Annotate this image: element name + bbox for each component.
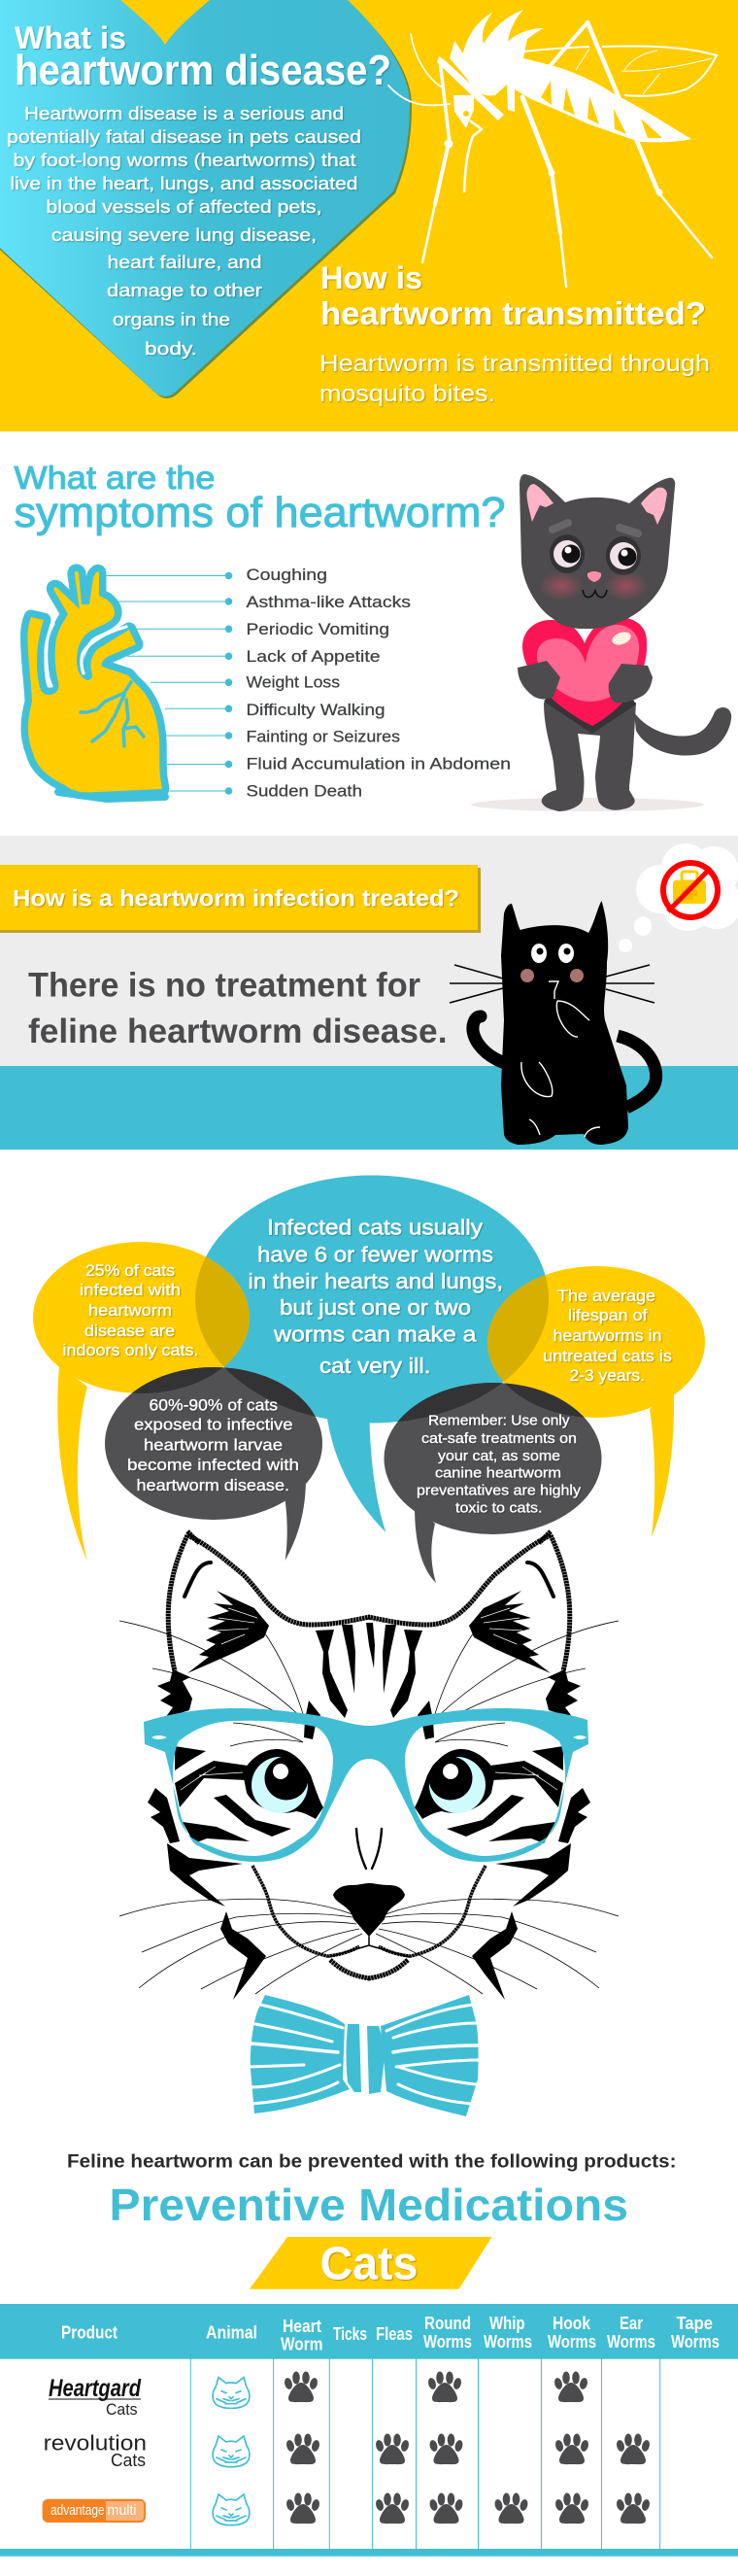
heading: what is heartworm disease [15, 20, 391, 94]
text: infected cats usually: Infected cats usually [267, 1216, 483, 1240]
text: infected cats usually: in their hearts and lungs, [249, 1269, 503, 1293]
text: average lifespan: untreated cats is [543, 1348, 672, 1365]
banner: how is a heartworm infection treated: How is a heartworm infection treated? [13, 886, 459, 912]
text block: mosquito bites [319, 351, 710, 407]
logo: Heartgard Cats: Heartgard [49, 2375, 142, 2402]
logo: advantage multi: advantage [50, 2502, 105, 2519]
text block: no treatment [28, 967, 447, 1050]
text block: mosquito bites: mosquito bites. [319, 381, 495, 407]
symptom list: Periodic Vomiting [247, 620, 389, 638]
bubble overlaps yellow and teal [195, 1256, 549, 1382]
bubble overlaps dark areas [132, 1367, 585, 1423]
heading: how is heartworm transmitted [320, 260, 706, 331]
text: average lifespan: 2-3 years. [569, 1367, 645, 1385]
text block: heartworm definition [7, 104, 361, 359]
banner: cats [250, 2237, 491, 2290]
text: average lifespan: The average [557, 1288, 655, 1305]
text: 60-90 percent: become infected with [127, 1457, 299, 1474]
banner: cats: Cats [320, 2239, 418, 2290]
logo: Heartgard Cats: Cats [106, 2400, 138, 2419]
heading: symptoms [14, 460, 505, 536]
table header row [0, 2304, 738, 2359]
speech bubble: remember (dark) [385, 1383, 602, 1583]
text block: heartworm definition: potentially fatal disease in pets caused [7, 127, 361, 147]
table header row: Animal [206, 2323, 257, 2343]
symptom list: Asthma-like Attacks [247, 593, 411, 611]
heading: how is heartworm transmitted: heartworm transmitted? [320, 295, 706, 331]
text: average lifespan: lifespan of [568, 1307, 648, 1324]
text: 60-90 percent [127, 1397, 299, 1494]
icon: anatomical heart [27, 571, 165, 799]
table header row: Worms [671, 2332, 720, 2352]
heading: how is heartworm transmitted: How is [320, 260, 422, 295]
text block: heartworm definition: causing severe lung disease, [51, 225, 317, 245]
table header row: Worms [607, 2332, 655, 2352]
panel: what is heartworm disease background [0, 0, 738, 431]
symptom list: Coughing [247, 566, 327, 584]
logo: revolution Cats: revolution [44, 2431, 147, 2456]
text block: mosquito bites: Heartworm is transmitted through [319, 351, 710, 377]
text: 60-90 percent: heartworm disease. [136, 1477, 289, 1494]
heading: symptoms: What are the [14, 460, 216, 496]
text: 60-90 percent: heartworm larvae [144, 1437, 283, 1455]
text block: heartworm definition: Heartworm disease is a serious and [24, 104, 344, 123]
text block: no treatment: There is no treatment for [28, 967, 420, 1005]
table header row: Tape [676, 2314, 713, 2333]
text: remember cat-safe [417, 1414, 582, 1517]
icon: mosquito [388, 10, 717, 287]
text: infected cats usually: but just one or two [280, 1295, 471, 1320]
table header row: Ear [620, 2314, 643, 2333]
text block: heartworm definition: organs in the [113, 310, 230, 329]
table header row: Worms [548, 2332, 596, 2352]
table header row: Round [424, 2314, 471, 2333]
logo: revolution Cats [44, 2431, 147, 2470]
text: 25% indoors: indoors only cats. [62, 1342, 198, 1359]
logo: advantage multi [43, 2499, 146, 2523]
symptom list: Weight Loss [247, 673, 340, 692]
table header row: Ticks [333, 2324, 367, 2344]
text: remember cat-safe: Remember: Use only [428, 1414, 570, 1429]
symptom list: Lack of Appetite [247, 647, 381, 666]
table header row: Heart [283, 2317, 321, 2336]
text: 25% indoors: 25% of cats [85, 1262, 175, 1280]
heading: preventive medications: Preventive Medications [109, 2180, 628, 2230]
text: infected cats usually: cat very ill. [319, 1354, 431, 1378]
heading: what is heartworm disease: heartworm disease? [15, 47, 391, 94]
table header row: Worms [423, 2332, 472, 2352]
text: remember cat-safe: your cat, as some [438, 1449, 560, 1464]
table: preventive medications [0, 2304, 738, 2557]
speech bubble: 60%-90% of cats (dark) [105, 1367, 322, 1561]
text: average lifespan: heartworms in [554, 1327, 662, 1345]
text block: heartworm definition: body. [145, 339, 197, 359]
text: 25% indoors [62, 1262, 198, 1359]
symptom list [247, 566, 511, 800]
icons: animal column cat faces [213, 2378, 250, 2525]
text: 60-90 percent: exposed to infective [134, 1417, 293, 1434]
symptom list: Fluid Accumulation in Abdomen [247, 755, 511, 773]
text: products intro: Feline heartworm can be prevented with the following products: [67, 2151, 676, 2173]
text: remember cat-safe: cat-safe treatments on [421, 1431, 577, 1447]
text: 25% indoors: heartworm [88, 1302, 172, 1320]
table header row: Whip [489, 2314, 525, 2333]
logo: Heartgard Cats [49, 2375, 142, 2419]
table header row: Hook [553, 2314, 591, 2333]
heading: what is heartworm disease: What is [15, 20, 126, 55]
illustration: black cat thinking [450, 901, 656, 1145]
logo: revolution Cats: Cats [111, 2451, 146, 2470]
illustration: gray cat holding heart [471, 474, 731, 811]
table header row: Worms [484, 2332, 532, 2352]
icon: striped bow tie [249, 1995, 480, 2116]
text: 60-90 percent: 60%-90% of cats [150, 1397, 278, 1415]
table header row: Worm [281, 2335, 322, 2354]
heading: symptoms: symptoms of heartworm? [14, 489, 505, 536]
text block: heartworm definition: heart failure, and [107, 253, 262, 272]
text: infected cats usually: have 6 or fewer worms [257, 1243, 493, 1267]
speech bubble: average lifespan (yellow) [487, 1266, 705, 1537]
text block: heartworm definition: blood vessels of affected pets, [47, 197, 322, 217]
banner: how is a heartworm infection treated [0, 865, 481, 933]
icons: row 2 paws [285, 2433, 651, 2464]
text: remember cat-safe: preventatives are highly [417, 1484, 582, 1499]
text: average lifespan [543, 1288, 672, 1385]
symptom list: Fainting or Seizures [247, 728, 400, 746]
symptom connector lines [105, 572, 232, 794]
text block: heartworm definition: damage to other [107, 281, 262, 300]
thought bubble with crossed-out medical kit [619, 843, 738, 952]
illustration: hipster cat with glasses [119, 1531, 619, 2000]
panel: how is infection treated background [0, 836, 738, 1150]
text: infected cats usually: worms can make a [273, 1322, 477, 1347]
icons: row 3 paws [285, 2493, 651, 2524]
text: remember cat-safe: canine heartworm [435, 1466, 561, 1482]
symptom list: Difficulty Walking [247, 701, 385, 719]
text block: no treatment: feline heartworm disease. [28, 1013, 447, 1050]
text: infected cats usually [249, 1216, 503, 1378]
symptom list: Sudden Death [247, 781, 362, 800]
heart shape [0, 0, 412, 398]
text: remember cat-safe: toxic to cats. [455, 1501, 542, 1517]
text: 25% indoors: infected with [80, 1282, 181, 1299]
speech bubble: 25% of cats (yellow) [33, 1242, 250, 1562]
table header row: Product [61, 2323, 117, 2343]
logo: advantage multi: multi [107, 2502, 136, 2519]
icons: row 1 paws [284, 2371, 588, 2402]
text block: heartworm definition: live in the heart, lungs, and associated [10, 174, 357, 193]
text block: heartworm definition: by foot-long worms (heartworms) that [14, 151, 355, 170]
text: 25% indoors: disease are [84, 1322, 175, 1340]
table header row: Fleas [376, 2324, 413, 2344]
speech bubble: infected cats (teal) [195, 1176, 549, 1532]
